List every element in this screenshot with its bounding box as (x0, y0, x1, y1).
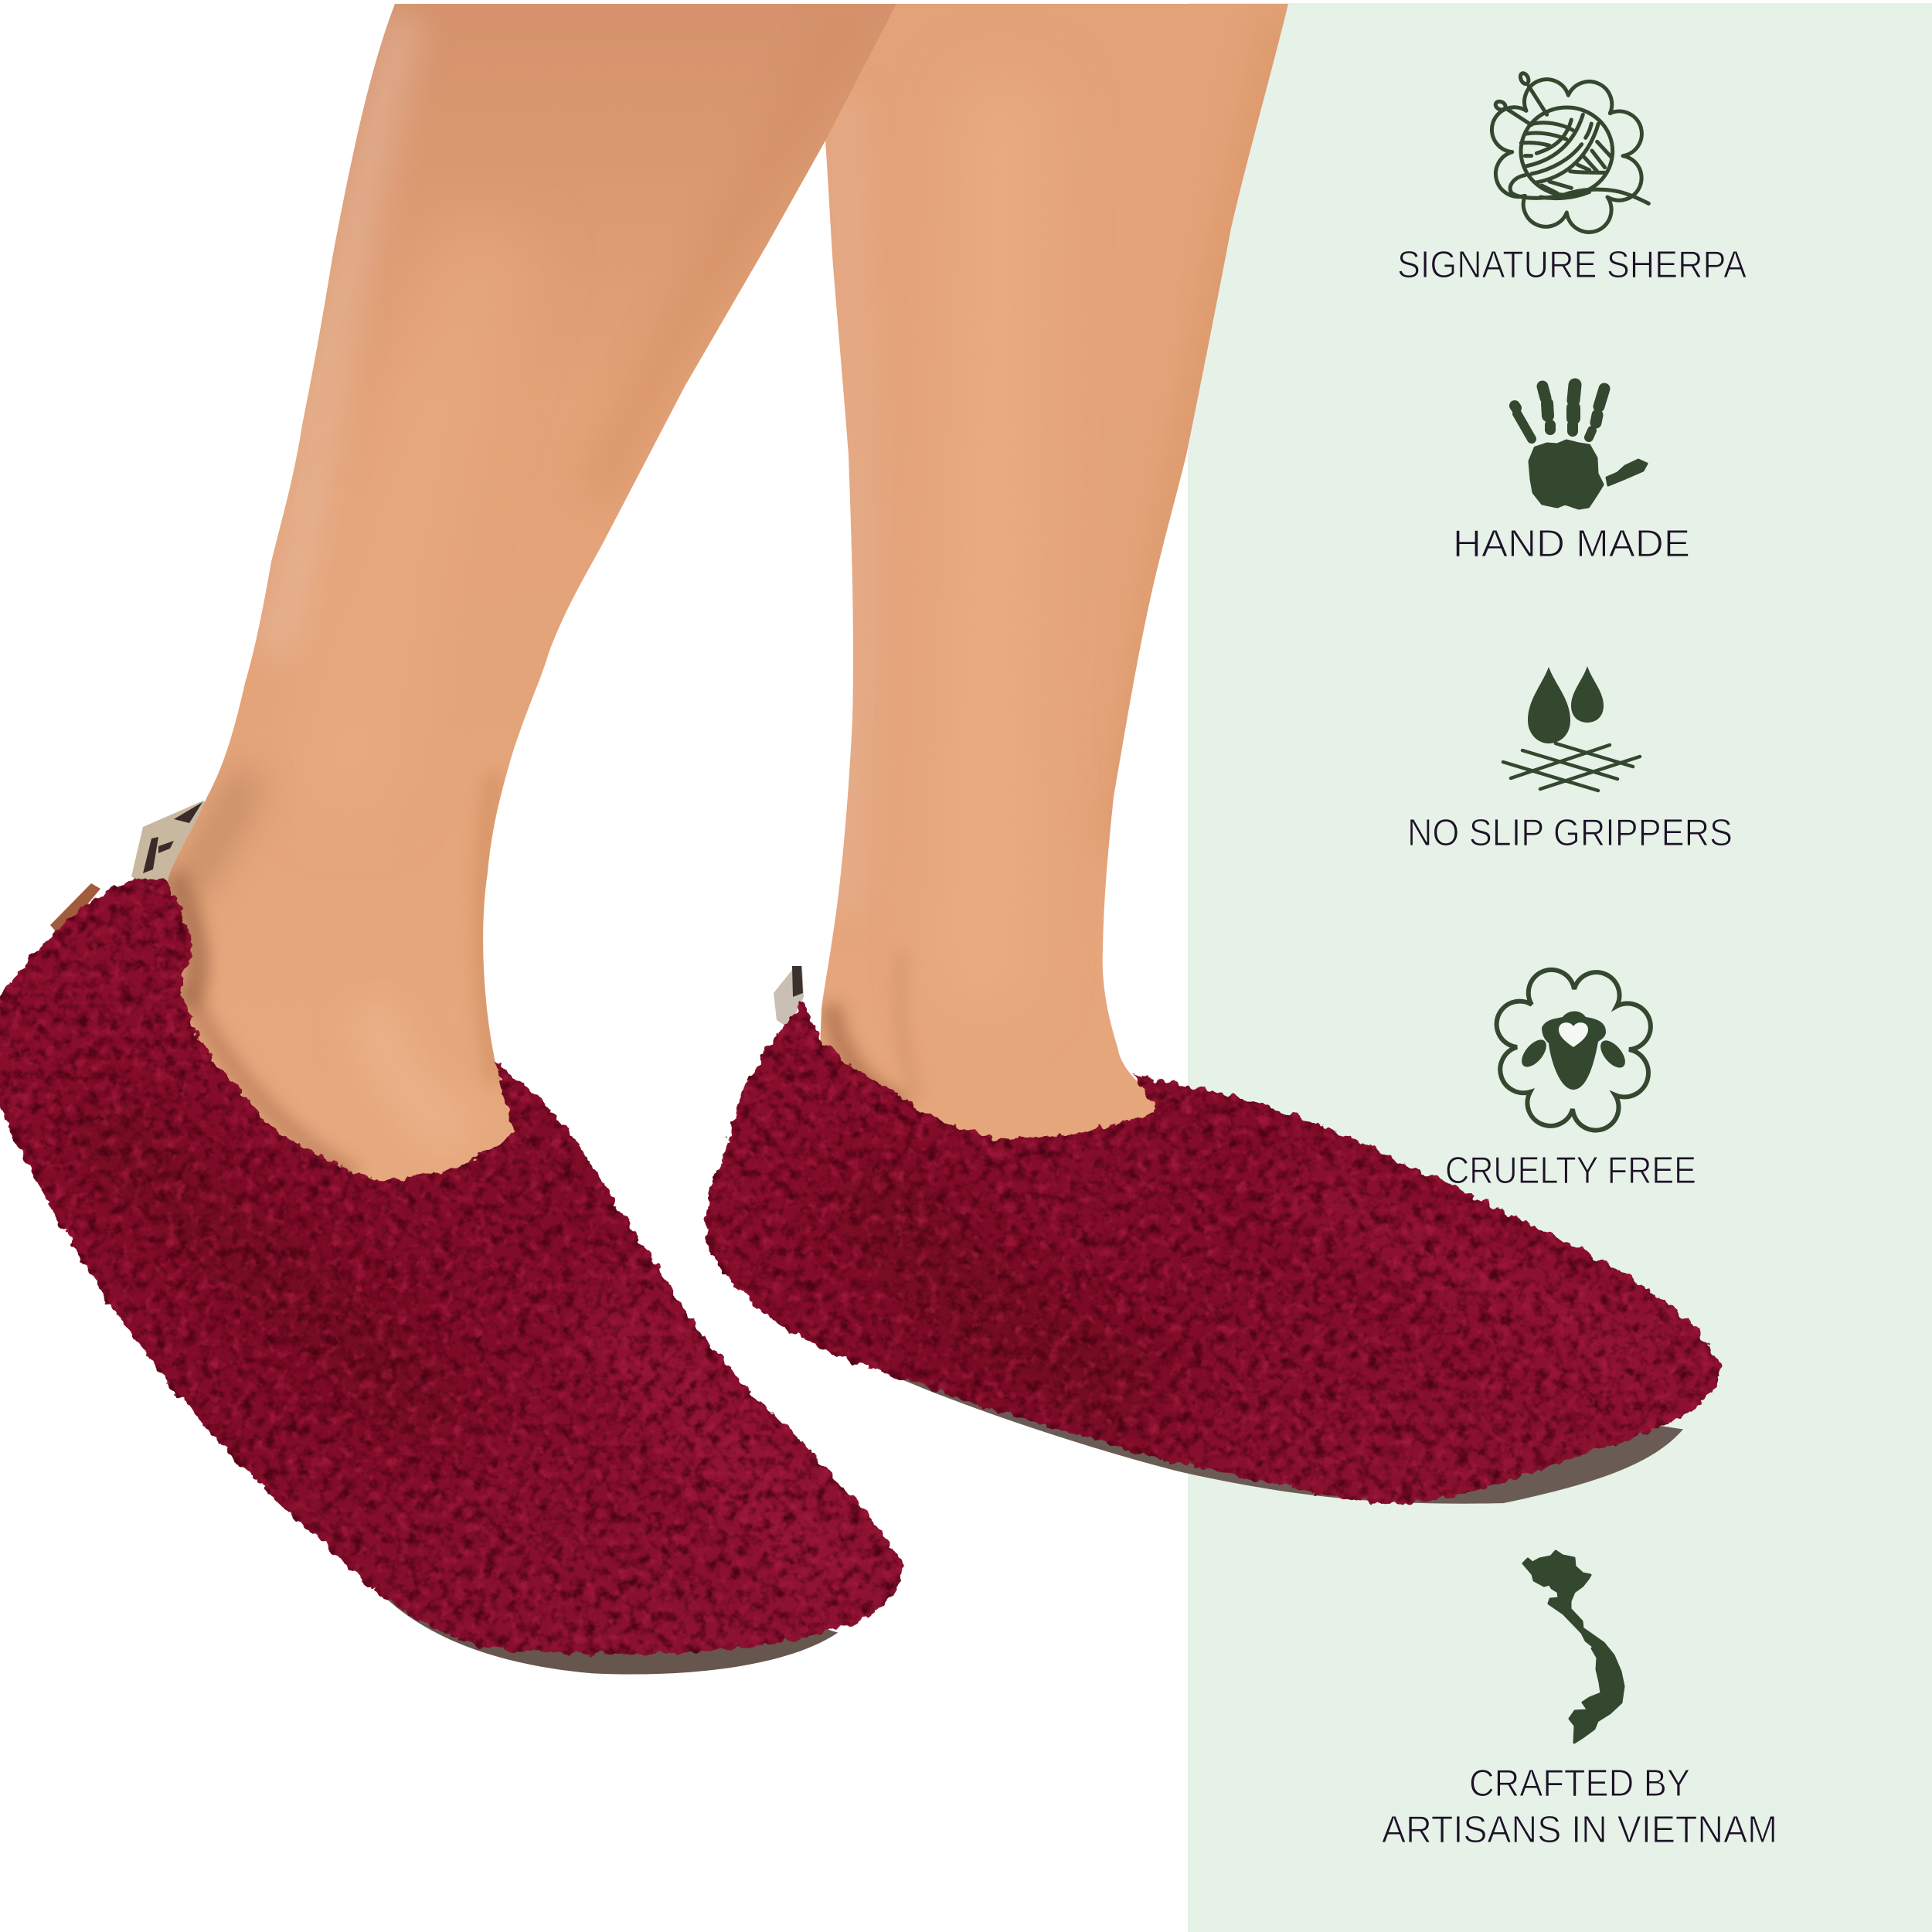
right slipper heel pull tab (774, 966, 804, 1055)
panel: features background (1188, 3, 1932, 1932)
right leg (819, 4, 1288, 1175)
left sherpa slipper (0, 877, 902, 1654)
icon: yarn ball with needles (1492, 72, 1648, 232)
label: CRUELTY FREE (1445, 1150, 1696, 1192)
icon: map of vietnam (1523, 1551, 1624, 1743)
label: HAND MADE (1453, 523, 1690, 565)
left leg (155, 4, 908, 1206)
label: line 1: CRAFTED BY (1469, 1763, 1690, 1804)
label: NO SLIP GRIPPERS (1407, 812, 1733, 854)
right slipper sole (862, 1362, 1683, 1504)
icon: droplets on grip mesh (1503, 666, 1640, 791)
left slipper sole (357, 1565, 838, 1675)
left slipper heel pull tab (50, 801, 232, 937)
icon: sheep in flower outline (1497, 970, 1651, 1131)
feature: hand made (1453, 385, 1690, 565)
photo: legs wearing slippers (0, 4, 1721, 1675)
icon: handprint (1515, 385, 1647, 508)
feature: crafted by artisans in vietnam (1382, 1551, 1777, 1851)
label: line 2: ARTISANS IN VIETNAM (1382, 1809, 1777, 1851)
feature: no slip grippers (1407, 666, 1733, 854)
right sherpa slipper (706, 1002, 1721, 1504)
feature: signature sherpa (1397, 72, 1747, 286)
label: SIGNATURE SHERPA (1397, 244, 1747, 286)
feature: cruelty free (1445, 970, 1696, 1192)
